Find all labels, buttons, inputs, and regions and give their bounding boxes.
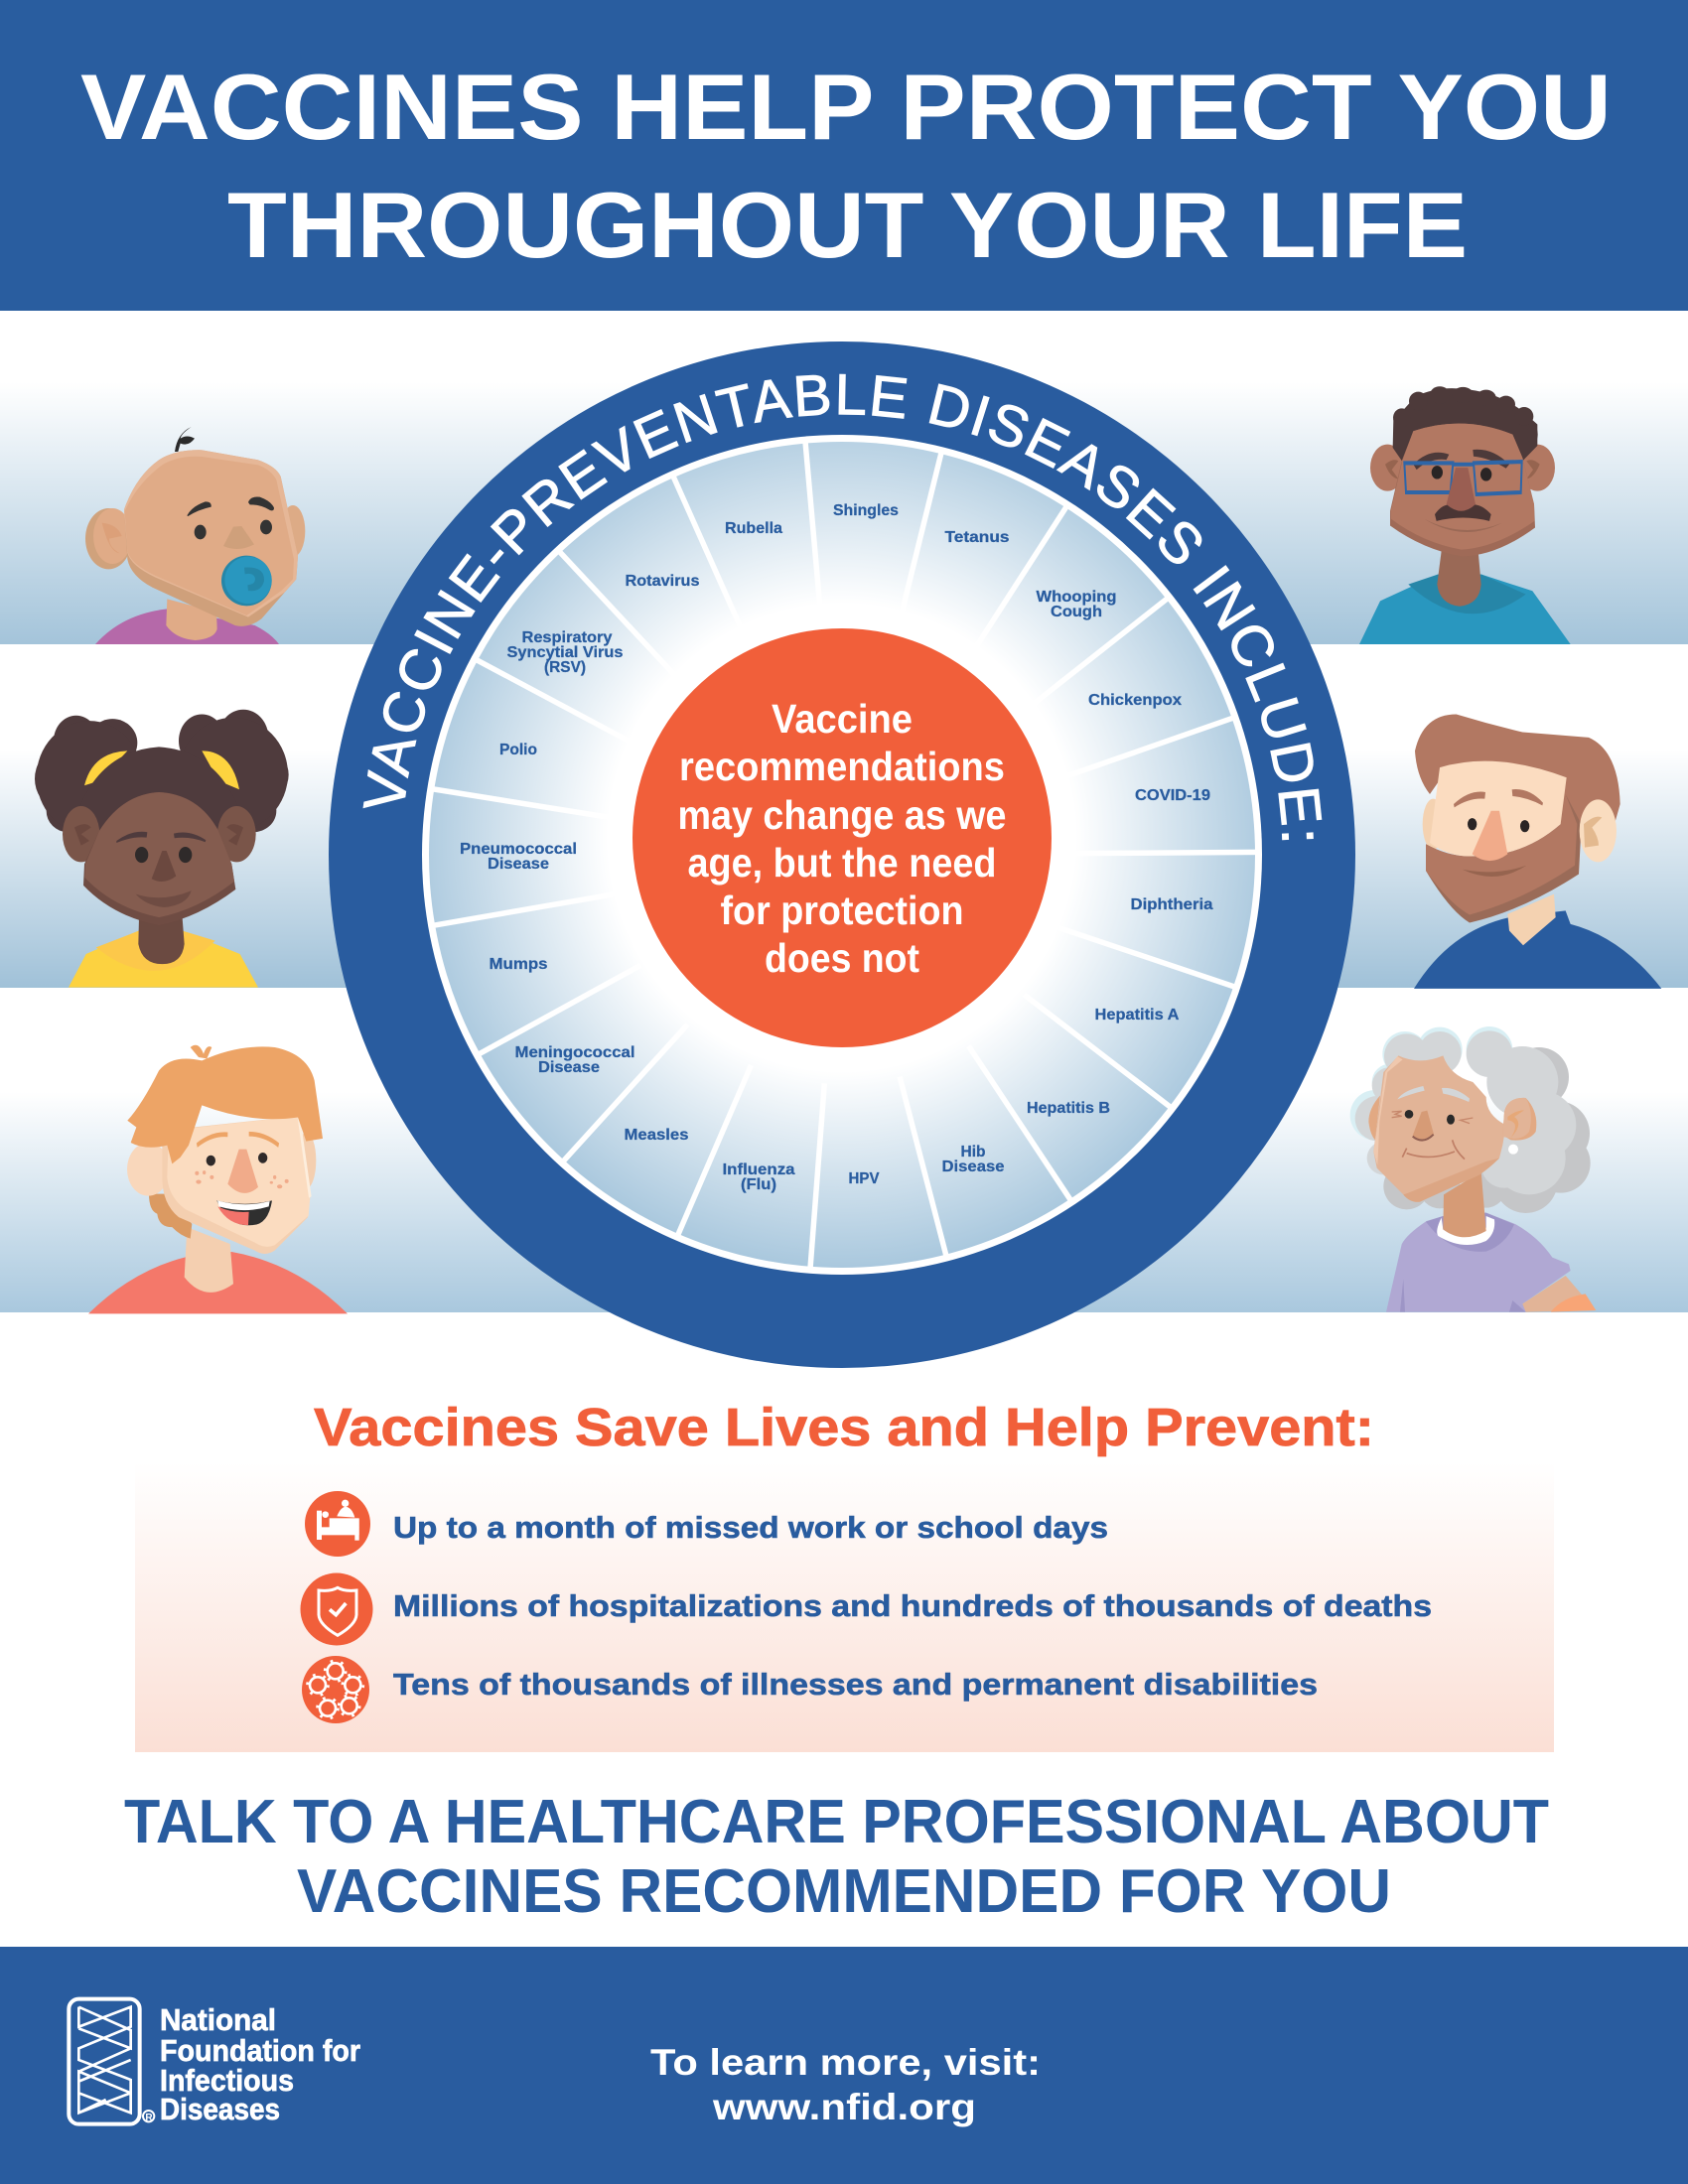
- illustration: man with glasses and moustache: [1359, 386, 1571, 644]
- centre orange callout: may change as we: [677, 792, 1007, 838]
- label: Rubella: Rubella: [725, 520, 782, 537]
- label: Tetanus: Tetanus: [945, 529, 1010, 546]
- label: Hib Disease: [941, 1144, 1005, 1175]
- registered mark: R: [145, 2113, 153, 2123]
- label: Whooping Cough: Cough: [1051, 604, 1102, 620]
- label: Respiratory Syncytial Virus (RSV): Syncytial Virus: [506, 644, 624, 661]
- outer blue ring: [329, 341, 1355, 1368]
- label: HPV: HPV: [848, 1170, 880, 1187]
- disease labels: [460, 502, 1213, 1193]
- title: THROUGHOUT YOUR LIFE: [227, 173, 1468, 277]
- label: Respiratory Syncytial Virus (RSV): [506, 629, 624, 676]
- centre orange callout: Vaccine: [772, 696, 913, 742]
- label: Diphtheria: Diphtheria: [1130, 896, 1213, 913]
- centre orange callout: for protection: [721, 887, 963, 933]
- icon: shield: [300, 1572, 373, 1646]
- label: Pneumococcal Disease: Pneumococcal: [460, 841, 577, 858]
- label: Measles: Measles: [624, 1127, 689, 1144]
- label: Mumps: Mumps: [489, 956, 548, 973]
- NFID wordmark: Diseases: [160, 2092, 280, 2126]
- title: VACCINES HELP PROTECT YOU: [80, 55, 1612, 159]
- NFID wordmark: Infectious: [160, 2063, 294, 2098]
- NFID wordmark: Foundation for: [160, 2033, 360, 2068]
- illustration: girl with pigtails: [35, 710, 289, 988]
- NFID wordmark: National: [160, 2002, 276, 2037]
- label: Shingles: Shingles: [833, 502, 899, 519]
- icon: hospital bed: [305, 1491, 370, 1557]
- label: Hepatitis B: Hepatitis B: [1027, 1100, 1110, 1117]
- label: Hib Disease: Hib: [961, 1144, 986, 1160]
- centre orange callout: [633, 628, 1052, 1047]
- footer link text: [650, 2042, 1041, 2127]
- centre orange callout: does not: [765, 935, 919, 981]
- label: Meningococcal Disease: Disease: [538, 1059, 600, 1076]
- illustration: baby with pacifier: [85, 427, 305, 644]
- illustration: boy with red hair: [88, 1045, 348, 1313]
- label: Rotavirus: Rotavirus: [626, 573, 700, 590]
- centre orange callout: age, but the need: [687, 840, 997, 886]
- benefit text 3: Tens of thousands of illnesses and permanent disabilities: [393, 1667, 1318, 1702]
- call to action: TALK TO A HEALTHCARE PROFESSIONAL ABOUT: [124, 1788, 1549, 1856]
- heading: vaccines save lives: Vaccines Save Lives and Help Prevent:: [314, 1398, 1374, 1457]
- vaccine wheel: [329, 341, 1355, 1368]
- footer link text: To learn more, visit:: [650, 2042, 1041, 2083]
- benefit text 2: Millions of hospitalizations and hundreds of thousands of deaths: [393, 1588, 1432, 1623]
- header banner: [0, 0, 1688, 311]
- wheel face: [422, 435, 1262, 1275]
- centre orange callout: recommendations: [679, 744, 1005, 789]
- label: Whooping Cough: Whooping: [1037, 589, 1116, 606]
- panel: benefits list: [135, 1462, 1554, 1752]
- icon: viruses: [302, 1656, 369, 1723]
- footer: [0, 1947, 1688, 2184]
- background gradient bands: [0, 382, 1688, 1312]
- footer link text: www.nfid.org: [712, 2087, 976, 2127]
- label: Hib Disease: Disease: [941, 1159, 1005, 1175]
- label: Influenza (Flu): [723, 1161, 795, 1193]
- ring heading (curved): VACCINE-PREVENTABLE DISEASES INCLUDE:: [363, 373, 1323, 840]
- call to action: [124, 1788, 1549, 1926]
- label: Influenza (Flu): Influenza: [723, 1161, 795, 1178]
- label: Respiratory Syncytial Virus (RSV): (RSV): [544, 659, 586, 676]
- label: Influenza (Flu): (Flu): [741, 1176, 776, 1193]
- label: Polio: Polio: [499, 742, 537, 758]
- label: Hepatitis A: Hepatitis A: [1094, 1007, 1180, 1024]
- label: Chickenpox: Chickenpox: [1088, 692, 1182, 709]
- label: Respiratory Syncytial Virus (RSV): Respiratory: [522, 629, 613, 646]
- illustration: older woman: [1350, 1026, 1596, 1312]
- title: [80, 55, 1612, 277]
- label: Meningococcal Disease: Meningococcal: [514, 1044, 635, 1061]
- label: Meningococcal Disease: [514, 1044, 635, 1076]
- label: COVID-19: COVID-19: [1135, 787, 1210, 804]
- label: Pneumococcal Disease: [460, 841, 577, 873]
- icon: NFID helix logo: [69, 1999, 154, 2124]
- call to action: VACCINES RECOMMENDED FOR YOU: [297, 1857, 1391, 1926]
- label: Whooping Cough: [1037, 589, 1116, 620]
- illustration: bearded man: [1414, 714, 1661, 989]
- label: Pneumococcal Disease: Disease: [488, 856, 549, 873]
- benefit text 1: Up to a month of missed work or school days: [393, 1510, 1108, 1545]
- NFID wordmark: [160, 2002, 360, 2126]
